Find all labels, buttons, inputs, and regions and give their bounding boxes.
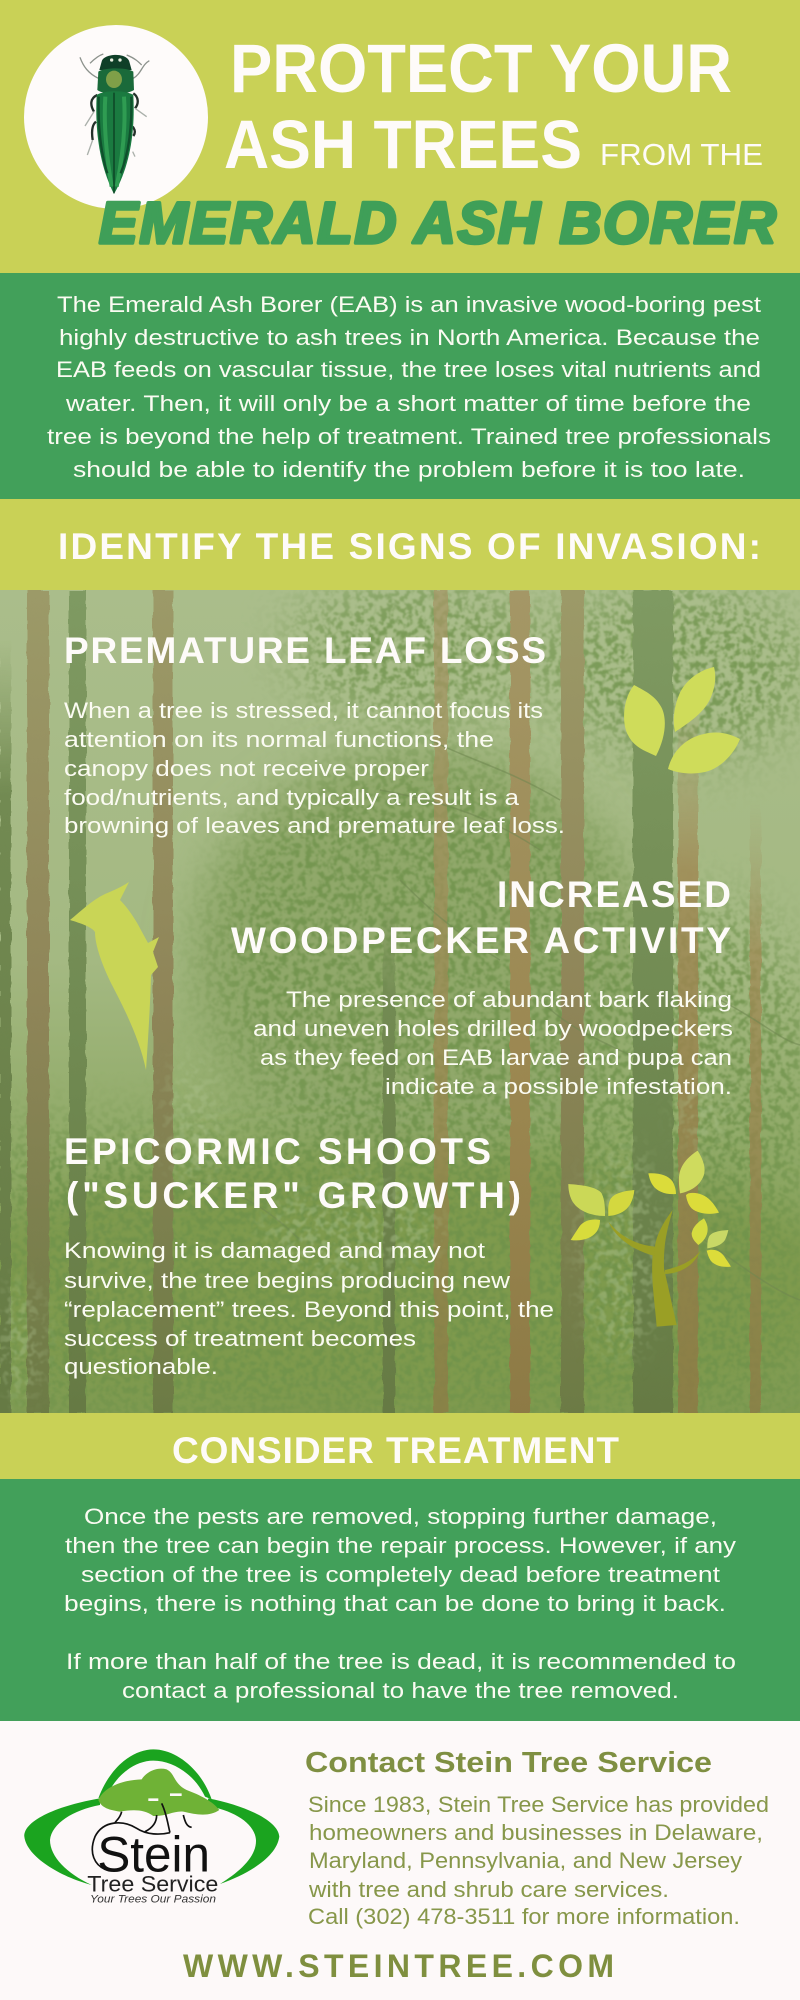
text block: contact details: Since 1983, Stein Tree Service has provided [308, 1792, 769, 1817]
section: premature leaf loss [64, 630, 740, 838]
text block: contact details: with tree and shrub care services. [308, 1877, 669, 1902]
text block: food/nutrients, and typically a result is a [64, 785, 520, 810]
title: PROTECT YOUR [230, 30, 732, 107]
text block: “replacement” trees. Beyond this point, the [64, 1297, 554, 1322]
panel: treatment text: then the tree can begin the repair process. However, if any [65, 1533, 736, 1558]
text block [253, 987, 733, 1099]
logo: Stein Tree Service: Stein [97, 1827, 210, 1883]
icon: emerald ash borer beetle [80, 54, 149, 194]
logo: Stein Tree Service: Your Trees Our Passion [90, 1894, 216, 1906]
text block: questionable. [64, 1354, 218, 1379]
text block [64, 698, 565, 838]
logo: Stein Tree Service [24, 1749, 279, 1906]
section: increased woodpecker activity [70, 874, 733, 1099]
title [99, 30, 776, 256]
heading: INCREASED [497, 874, 731, 915]
text block: When a tree is stressed, it cannot focus its [64, 698, 543, 723]
text block [64, 1238, 554, 1379]
panel: introduction: EAB feeds on vascular tissue, the tree loses vital nutrients and [56, 357, 761, 382]
icon: leaves [624, 667, 740, 773]
text block: success of treatment becomes [64, 1326, 416, 1351]
text block: browning of leaves and premature leaf loss. [64, 813, 565, 838]
text block: indicate a possible infestation. [385, 1074, 732, 1099]
panel: treatment text: section of the tree is completely dead before treatment [81, 1562, 720, 1587]
heading: consider treatment [0, 1413, 800, 1479]
text block: Knowing it is damaged and may not [64, 1238, 485, 1263]
icon: white circle behind beetle [24, 25, 208, 209]
panel: introduction: tree is beyond the help of treatment. Trained tree professionals [47, 424, 771, 449]
heading: PREMATURE LEAF LOSS [64, 630, 546, 671]
text block: contact details: homeowners and businesses in Delaware, [309, 1820, 763, 1845]
panel: treatment text: begins, there is nothing that can be done to bring it back. [64, 1591, 726, 1616]
heading: consider treatment: CONSIDER TREATMENT [172, 1430, 619, 1471]
panel: introduction: The Emerald Ash Borer (EAB) is an invasive wood-boring pest [57, 292, 761, 317]
heading [231, 874, 731, 961]
text block: as they feed on EAB larvae and pupa can [260, 1045, 732, 1070]
text block: and uneven holes drilled by woodpeckers [253, 1016, 733, 1041]
panel: contact footer [0, 1721, 800, 2000]
text block: The presence of abundant bark flaking [286, 987, 732, 1012]
panel: forest signs of invasion [0, 580, 800, 1430]
text block: contact details [308, 1792, 769, 1929]
website url: WWW.STEINTREE.COM [183, 1948, 614, 1984]
text block: attention on its normal functions, the [64, 727, 494, 752]
panel: introduction: highly destructive to ash trees in North America. Because the [59, 325, 760, 350]
section: epicormic shoots [64, 1131, 731, 1379]
panel: introduction: water. Then, it will only be a short matter of time before the [65, 391, 751, 416]
icon: sprouting tree [568, 1151, 731, 1327]
heading: identify the signs: IDENTIFY THE SIGNS OF INVASION: [58, 526, 761, 567]
logo: Stein Tree Service: Tree Service [87, 1872, 218, 1897]
title: FROM THE [600, 137, 763, 172]
heading: identify the signs [0, 499, 800, 590]
panel: treatment text [0, 1479, 800, 1721]
panel: treatment text: contact a professional to have the tree removed. [122, 1678, 679, 1703]
panel: header [0, 0, 800, 273]
title: EMERALD ASH BORER [99, 191, 776, 256]
panel: treatment text: Once the pests are removed, stopping further damage, [84, 1504, 717, 1529]
text block: survive, the tree begins producing new [64, 1268, 510, 1293]
heading: ("SUCKER" GROWTH) [66, 1175, 521, 1216]
heading [64, 1131, 521, 1216]
heading: contact: Contact Stein Tree Service [305, 1747, 712, 1779]
icon: woodpecker [70, 882, 159, 1070]
text block: canopy does not receive proper [64, 756, 429, 781]
text block: contact details: Call (302) 478-3511 for more information. [308, 1904, 740, 1929]
panel: introduction: should be able to identify the problem before it is too late. [73, 457, 745, 482]
panel: introduction [0, 273, 800, 499]
heading: WOODPECKER ACTIVITY [231, 920, 731, 961]
panel: treatment text: If more than half of the tree is dead, it is recommended to [66, 1649, 736, 1674]
forest photo background [0, 580, 800, 1430]
title: ASH TREES [224, 106, 582, 183]
heading: EPICORMIC SHOOTS [64, 1131, 491, 1172]
text block: contact details: Maryland, Pennsylvania, and New Jersey [309, 1848, 742, 1873]
